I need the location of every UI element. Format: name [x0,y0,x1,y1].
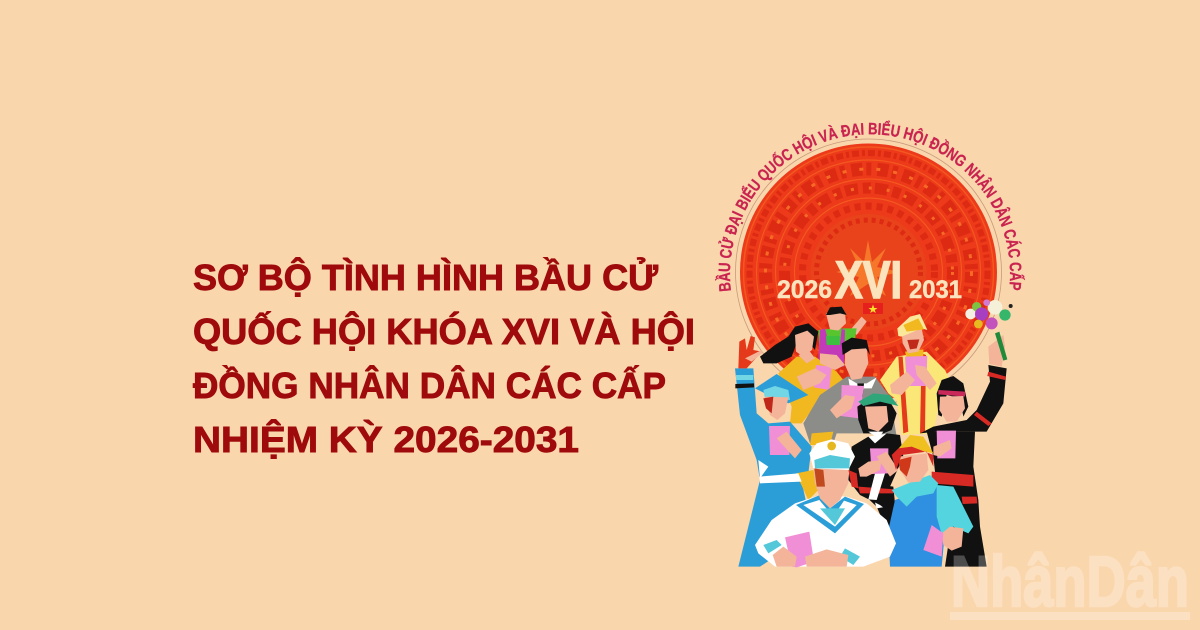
title: ĐỒNG NHÂN DÂN CÁC CẤP [193,364,666,406]
figure: man in yellow tunic and turban [880,314,950,435]
figure: woman in black with flowers [920,335,1007,567]
title: NHIỆM KỲ 2026-2031 [193,418,579,460]
bronze drum emblem [736,139,1002,405]
figure: child with flag [818,307,867,367]
circular slogan: BẦU CỬ ĐẠI BIỂU QUỐC HỘI VÀ ĐẠI BIỂU HỘI ĐỒNG NHÂN DÂN CÁC CẤP [715,120,1025,292]
year 2031: 2031 [909,276,962,304]
figure: worker in hard hat [888,435,973,567]
sun star [836,240,900,296]
title [193,256,695,460]
title: QUỐC HỘI KHÓA XVI VÀ HỘI [193,310,695,352]
figure: man in grey suit [803,338,897,445]
figure: woman with green beret [848,393,903,530]
XVI numeral: XVI [835,251,902,310]
figure: sailor [755,439,896,567]
title: SƠ BỘ TÌNH HÌNH BẦU CỬ [193,256,658,298]
figure: woman in yellow [760,323,845,423]
illustration: voters [735,299,1013,567]
icon: flower bouquet [965,299,1013,361]
year 2026: 2026 [777,276,832,304]
icon: Vietnamese flag [863,303,883,314]
figure: woman with raised hand [735,336,818,567]
